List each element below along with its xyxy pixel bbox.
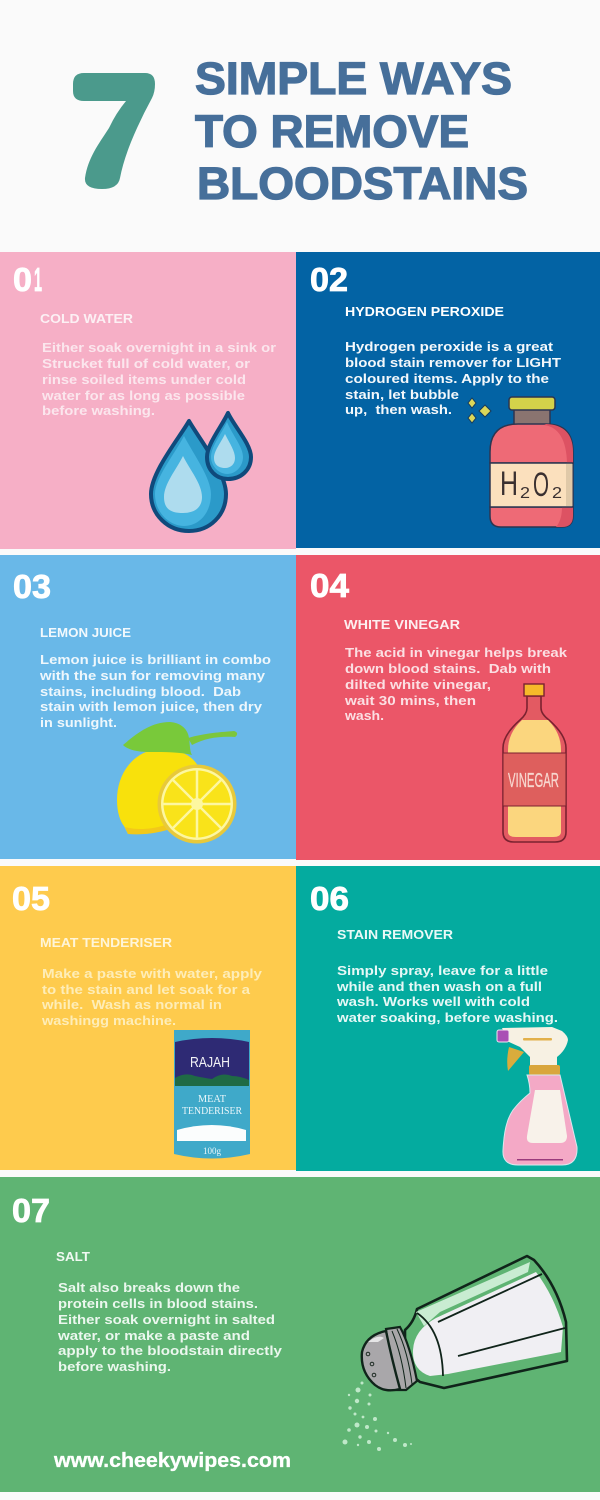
body text: with the sun for removing many — [39, 669, 265, 683]
panel: 07 salt — [0, 1177, 600, 1492]
body text: Lemon juice is brilliant in combo — [40, 653, 271, 667]
icon: spray bottle — [497, 1027, 577, 1165]
body text — [41, 341, 276, 418]
body text: wait 30 mins, then — [344, 694, 476, 708]
body text — [345, 340, 561, 417]
body text: Make a paste with water, apply — [42, 967, 262, 981]
icon: vinegar bottle — [503, 684, 566, 842]
number 03: 03 — [13, 568, 51, 605]
icon: meat tenderiser packet — [174, 1030, 250, 1158]
label text: H2O2: 2 — [520, 485, 530, 502]
heading: lemon juice: LEMON JUICE — [40, 625, 131, 640]
heading: meat tenderiser: MEAT TENDERISER — [40, 935, 173, 950]
number 02: 02 — [310, 261, 348, 298]
number 01 — [13, 261, 42, 298]
title text: BLOODSTAINS — [197, 158, 528, 209]
body text: before washing. — [58, 1360, 171, 1374]
body text — [336, 964, 558, 1025]
body text: to the stain and let soak for a — [42, 983, 251, 997]
body text: down blood stains. Dab with — [345, 662, 551, 676]
salt grains — [342, 1382, 412, 1451]
title text: TO REMOVE — [195, 106, 469, 157]
icon: sparkles — [468, 398, 491, 423]
icon: meat tenderiser packet: MEAT — [198, 1093, 226, 1105]
number 06: 06 — [310, 880, 349, 917]
body text: wash. Works well with cold — [336, 995, 530, 1009]
panel: 04 white vinegar — [296, 555, 600, 860]
body text: before washing. — [42, 404, 155, 418]
body text: in sunlight. — [40, 716, 117, 730]
icon: water drops — [151, 413, 251, 531]
panel: 05 meat tenderiser — [0, 866, 296, 1170]
body text: rinse soiled items under cold — [42, 373, 246, 387]
label text: vinegar: VINEGAR — [508, 770, 559, 792]
body text: water, or make a paste and — [57, 1329, 250, 1343]
panel: 01 cold water: 1 — [34, 261, 42, 298]
icon: salt shaker — [342, 1256, 567, 1451]
body text: stain, let bubble — [345, 388, 459, 402]
body text: apply to the bloodstain directly — [58, 1344, 282, 1358]
number 01: 0 — [13, 261, 32, 298]
body text: stains, including blood. Dab — [40, 685, 241, 699]
icon: lemon — [117, 722, 237, 844]
heading: salt: SALT — [56, 1249, 90, 1264]
body text: washingg machine. — [41, 1014, 176, 1028]
icon: H2O2 bottle — [490, 397, 573, 527]
panel: 03 lemon juice — [0, 555, 296, 859]
icon: meat tenderiser packet: TENDERISER — [182, 1105, 243, 1117]
body text: wash. — [344, 709, 384, 723]
body text: Either soak overnight in a sink or — [42, 341, 276, 355]
body text: water soaking, before washing. — [336, 1011, 558, 1025]
heading: hydrogen peroxide: HYDROGEN PEROXIDE — [345, 304, 504, 319]
body text — [39, 653, 271, 730]
panel: 06 stain remover — [296, 866, 600, 1171]
heading: cold water: COLD WATER — [40, 311, 134, 326]
header with title — [73, 53, 528, 209]
number 07: 07 — [12, 1192, 50, 1229]
body text: water for as long as possible — [41, 389, 245, 403]
body text: Strucket full of cold water, or — [42, 357, 250, 371]
heading: stain remover: STAIN REMOVER — [337, 927, 454, 942]
website url: www.cheekywipes.com — [53, 1449, 291, 1472]
icon: meat tenderiser packet: 100g — [203, 1146, 222, 1156]
label text: H2O2 — [500, 465, 562, 504]
label text: H2O2: 2 — [552, 485, 562, 502]
title text — [195, 53, 528, 209]
body text: Simply spray, leave for a little — [337, 964, 548, 978]
title text: SIMPLE WAYS — [195, 53, 512, 104]
big numeral 7 — [73, 73, 155, 189]
body text: up, then wash. — [345, 403, 452, 417]
icon: meat tenderiser packet: RAJAH — [190, 1055, 230, 1071]
label text: H2O2: O — [533, 466, 549, 504]
body text: blood stain remover for LIGHT — [345, 356, 561, 370]
panel: 01 cold water — [0, 252, 296, 549]
body text: dilted white vinegar, — [345, 678, 491, 692]
body text: Salt also breaks down the — [58, 1281, 240, 1295]
body text — [57, 1281, 282, 1374]
body text: protein cells in blood stains. — [58, 1297, 258, 1311]
heading: white vinegar: WHITE VINEGAR — [344, 617, 461, 632]
body text: Either soak overnight in salted — [58, 1313, 275, 1327]
body text: The acid in vinegar helps break — [345, 646, 567, 660]
number 05: 05 — [12, 880, 50, 917]
body text: while. Wash as normal in — [41, 998, 222, 1012]
body text: stain with lemon juice, then dry — [40, 700, 262, 714]
body text — [41, 967, 262, 1028]
label text: H2O2: H — [500, 465, 518, 503]
body text — [344, 646, 567, 723]
body text: Hydrogen peroxide is a great — [345, 340, 554, 354]
body text: coloured items. Apply to the — [345, 372, 549, 386]
panel: 02 hydrogen peroxide — [296, 252, 600, 548]
number 04: 04 — [310, 567, 350, 604]
body text: while and then wash on a full — [336, 980, 542, 994]
